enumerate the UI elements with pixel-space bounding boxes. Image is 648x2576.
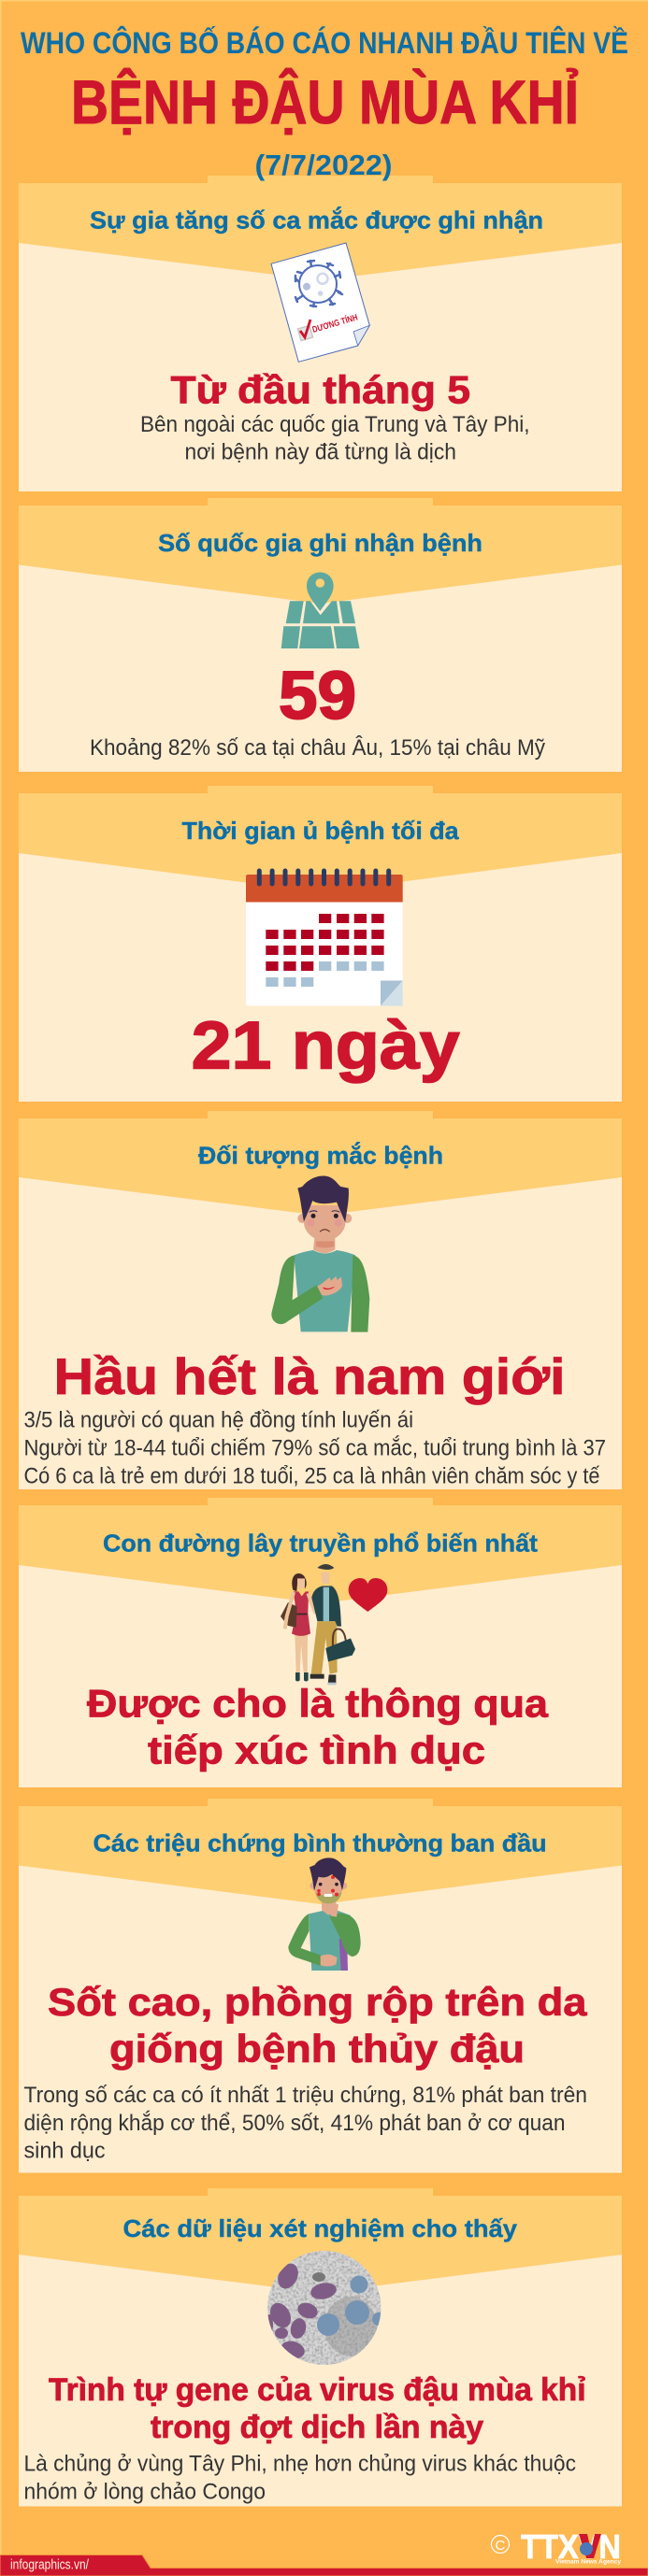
icon: electron microscope image of virus: [266, 2251, 385, 2365]
panel: initial symptoms: [19, 1799, 622, 2173]
description: sinh dục: [24, 2138, 105, 2164]
panel flap: [19, 1498, 622, 1603]
panel: transmission route: [19, 1498, 622, 1787]
panel: number of countries: [19, 498, 622, 772]
icon: positive test document: DƯƠNG TÍNH: [311, 312, 359, 335]
icon: positive test document: [271, 243, 369, 362]
key figure: Được cho là thông qua: [87, 1682, 549, 1725]
heading: Số quốc gia ghi nhận bệnh: [158, 529, 482, 557]
key figure: [48, 1980, 587, 2071]
key figure: Trình tự gene của virus đậu mùa khỉ: [49, 2372, 585, 2408]
description: [24, 2083, 587, 2164]
description: Trong số các ca có ít nhất 1 triệu chứng, 81% phát ban trên: [24, 2083, 587, 2108]
description: Có 6 ca là trẻ em dưới 18 tuổi, 25 ca là nhân viên chăm sóc y tế: [24, 1463, 600, 1489]
description: nơi bệnh này đã từng là dịch: [185, 439, 456, 465]
copyright logo: TTXVN: Vietnam News Agency: [555, 2558, 621, 2566]
panel flap: [19, 176, 622, 280]
panel body: [19, 2196, 622, 2506]
heading: Đối tượng mắc bệnh: [198, 1142, 443, 1170]
icon: sick man: [271, 1175, 369, 1332]
key figure: giống bệnh thủy đậu: [109, 2027, 525, 2071]
key figure: 21 ngày: [192, 1009, 460, 1084]
description: [24, 1407, 606, 1489]
copyright logo: TTXVN: C: [496, 2538, 505, 2554]
panel: affected group: [19, 1111, 622, 1489]
panel body: [19, 183, 622, 491]
key figure: Từ đầu tháng 5: [170, 368, 470, 411]
key figure: Sốt cao, phồng rộp trên da: [48, 1980, 587, 2024]
description: [24, 2452, 576, 2504]
footer bar: [0, 2555, 648, 2576]
panel body: [19, 1118, 622, 1489]
description: 3/5 là người có quan hệ đồng tính luyến ái: [24, 1407, 413, 1433]
key figure: 59: [279, 659, 356, 733]
key figure: [49, 2372, 585, 2445]
panel body: [19, 793, 622, 1102]
title block: [21, 26, 628, 181]
description: Là chủng ở vùng Tây Phi, nhẹ hơn chủng virus khác thuộc: [24, 2452, 576, 2476]
copyright logo: TTXVN: TTXVN: [521, 2527, 621, 2566]
panel flap: [19, 2188, 622, 2293]
icon: calendar: [246, 871, 403, 1005]
panel flap: [19, 498, 622, 604]
icon: map pin: [281, 572, 359, 648]
description: Bên ngoài các quốc gia Trung và Tây Phi,: [140, 412, 529, 437]
panel body: [19, 1505, 622, 1787]
key figure: Hầu hết là nam giới: [54, 1347, 565, 1405]
heading: Thời gian ủ bệnh tối đa: [181, 817, 459, 845]
icon: couple and heart: [281, 1564, 387, 1685]
heading: Các triệu chứng bình thường ban đầu: [94, 1829, 546, 1857]
heading: Các dữ liệu xét nghiệm cho thấy: [123, 2214, 518, 2242]
icon: man with rash: [288, 1857, 361, 1971]
panel flap: [19, 1799, 622, 1904]
key figure: tiếp xúc tình dục: [148, 1729, 485, 1772]
description: diện rộng khắp cơ thể, 50% sốt, 41% phát ban ở cơ quan: [24, 2111, 565, 2136]
heading: Sự gia tăng số ca mắc được ghi nhận: [90, 206, 543, 234]
panel: incubation: [19, 786, 622, 1102]
description: Khoảng 82% số ca tại châu Âu, 15% tại châu Mỹ: [90, 735, 545, 761]
key figure: [87, 1682, 549, 1772]
source url: infographics.vn/: [10, 2556, 90, 2573]
description: [140, 412, 529, 465]
panel flap: [19, 1111, 622, 1216]
panel: cases rising: [19, 176, 622, 491]
panel body: [19, 505, 622, 772]
key figure: trong đợt dịch lần này: [151, 2410, 483, 2445]
panel body: [19, 1806, 622, 2173]
panel: lab data: [19, 2188, 622, 2506]
panel flap: [19, 786, 622, 892]
description: nhóm ở lòng chảo Congo: [24, 2480, 266, 2504]
description: Người từ 18-44 tuổi chiếm 79% số ca mắc, tuổi trung bình là 37: [24, 1435, 606, 1461]
date: (7/7/2022): [254, 149, 393, 181]
heading: Con đường lây truyền phổ biến nhất: [103, 1529, 538, 1557]
